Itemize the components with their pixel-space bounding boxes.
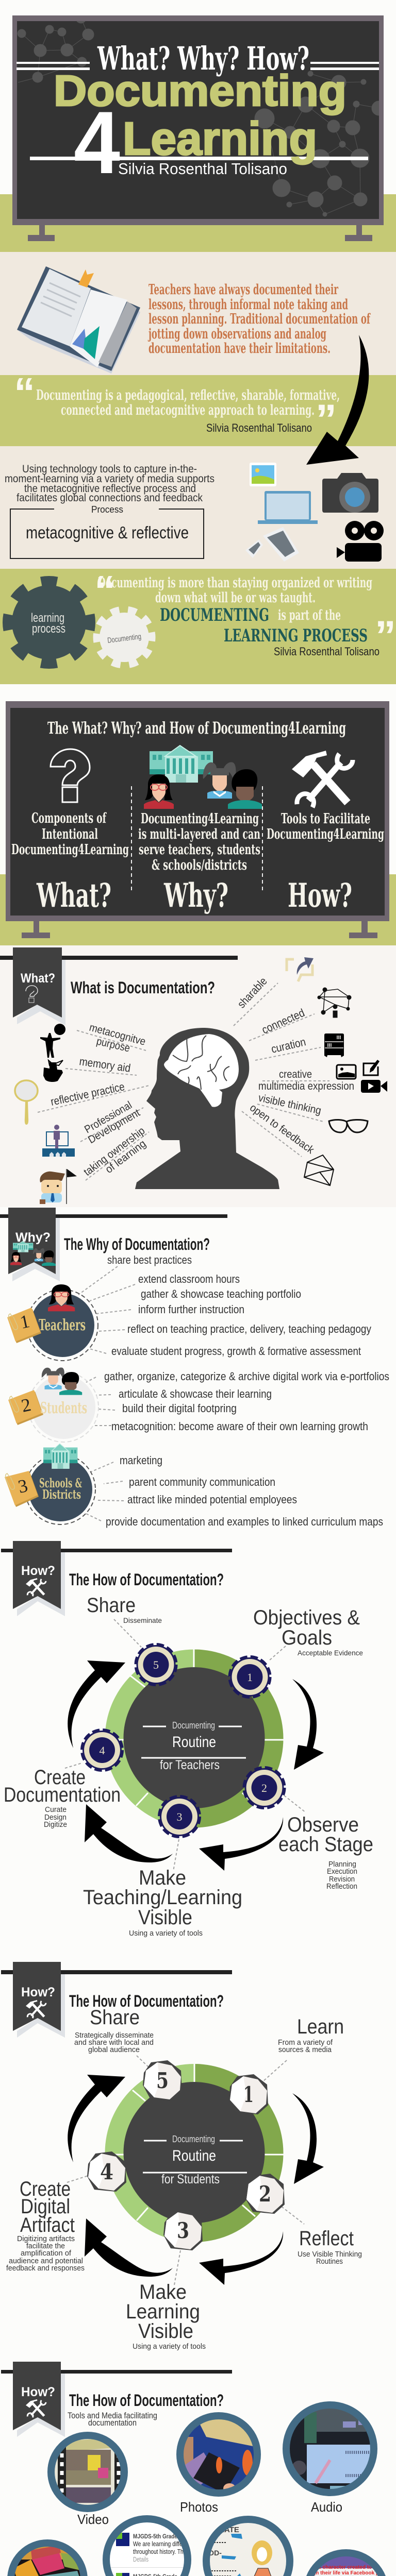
chart: routine ring bbox=[105, 2064, 284, 2242]
icon: thinking figure bbox=[40, 1024, 65, 1058]
step label: observe each stage: Planning bbox=[328, 1860, 356, 1869]
panel: teachers: Teachers bbox=[39, 1316, 86, 1334]
step label: make teaching learning visible bbox=[83, 1867, 242, 1938]
text: how column bbox=[267, 811, 384, 842]
step label: observe each stage: Observe bbox=[287, 1814, 359, 1836]
step label: create digital artifact: facilitate the bbox=[26, 2242, 65, 2250]
media: tweets: Details bbox=[133, 2555, 148, 2563]
icon: head with brain bbox=[135, 1028, 279, 1189]
text: teachers list bbox=[107, 1253, 371, 1358]
badge: step 2: 2 bbox=[261, 1782, 267, 1794]
icon: documenting gear: Documenting bbox=[107, 632, 142, 645]
opening quote mark: “ bbox=[14, 369, 35, 416]
heading: The How of Documentation? bbox=[69, 1992, 224, 2010]
label: creative multimedia expression: creative bbox=[279, 1069, 312, 1080]
step label: reflect: Use Visible Thinking bbox=[298, 2250, 362, 2259]
chart: routine ring: for Students bbox=[161, 2172, 220, 2187]
icon: video play bbox=[361, 1080, 387, 1093]
step label: create documentation: Digitize bbox=[44, 1820, 67, 1829]
panel: process box: Process bbox=[91, 504, 123, 515]
media: sketchnotes: DD- bbox=[209, 2549, 222, 2557]
board legs bbox=[28, 225, 372, 241]
board surface bbox=[17, 21, 379, 219]
label: metacognitive purpose: purpose bbox=[95, 1035, 131, 1055]
opening quote mark: “ bbox=[94, 567, 116, 614]
media: post-it notes bbox=[7, 2539, 88, 2576]
label: curation bbox=[255, 1035, 321, 1060]
label: professional development: Professional bbox=[82, 1099, 134, 1136]
badge: step 4 bbox=[82, 1731, 122, 1770]
step label: create digital artifact bbox=[6, 2178, 85, 2273]
icon: learning process gear: learning bbox=[31, 611, 64, 625]
step label: create documentation bbox=[4, 1766, 121, 1829]
panel: students bbox=[8, 1367, 98, 1442]
text: tools and media: documentation bbox=[88, 2418, 137, 2428]
section: tools and media bbox=[1, 2362, 389, 2576]
panel: schools and districts: Schools & bbox=[39, 1476, 82, 1490]
icon: share bbox=[287, 957, 314, 981]
gem: step 5: 5 bbox=[156, 2068, 169, 2093]
chart: routine ring: Routine bbox=[172, 2147, 216, 2164]
step label: observe each stage: Execution bbox=[327, 1867, 357, 1876]
label: connected bbox=[249, 1006, 315, 1041]
step label: create documentation: Create bbox=[34, 1766, 86, 1789]
icon: camera bbox=[322, 473, 378, 513]
text: why column: is multi-layered and can bbox=[138, 826, 260, 842]
panel: process box bbox=[10, 504, 204, 558]
callout: documenting quote: Silvia Rosenthal Tolisano bbox=[206, 421, 312, 434]
heading: What is Documentation? bbox=[71, 978, 215, 997]
gem: step 1 bbox=[229, 2074, 268, 2114]
text: tools and media bbox=[68, 2411, 157, 2428]
text: what column: Documenting4Learning bbox=[11, 842, 129, 858]
step label: create digital artifact: audience and potential bbox=[9, 2257, 83, 2265]
connectors bbox=[78, 1266, 135, 1521]
step label: make teaching learning visible: Visible bbox=[138, 1906, 192, 1929]
step label: objectives and goals: Goals bbox=[282, 1626, 332, 1649]
step label: objectives and goals: Acceptable Evidence bbox=[298, 1649, 363, 1657]
badge: step 4: 4 bbox=[99, 1744, 105, 1757]
ribbon: how: How? bbox=[21, 1985, 55, 1999]
step label: learn: From a variety of bbox=[278, 2038, 333, 2047]
chart: routine ring: for Teachers bbox=[160, 1758, 220, 1772]
panel: schools and districts bbox=[5, 1444, 95, 1524]
panel: schools and districts: 3 bbox=[16, 1475, 29, 1497]
arrow: curved black bbox=[306, 335, 369, 465]
label: reflective practice: reflective practice bbox=[50, 1080, 126, 1108]
label: connected: connected bbox=[260, 1006, 306, 1037]
section: how routine for students bbox=[1, 1962, 362, 2351]
media: screenshots bbox=[304, 2549, 389, 2576]
heading: The How of Documentation? bbox=[69, 1570, 224, 1589]
text: students list bbox=[104, 1370, 389, 1433]
icon: glasses bbox=[329, 1120, 368, 1132]
step label: create documentation: Curate bbox=[45, 1805, 67, 1814]
connectors bbox=[67, 2056, 304, 2285]
label: why: Why? bbox=[163, 876, 228, 915]
badge: step 1: 1 bbox=[247, 1671, 253, 1684]
heading: The How of Documentation? bbox=[69, 2391, 224, 2410]
media: video: Video bbox=[77, 2512, 109, 2527]
step label: reflect: Reflect bbox=[299, 2227, 354, 2250]
icon: hand mirror bbox=[15, 1080, 38, 1125]
label: metacognitive purpose bbox=[77, 1022, 147, 1055]
panel: process box: metacognitive & reflective bbox=[26, 523, 189, 542]
step label: share: and share with local and bbox=[74, 2038, 154, 2047]
media: tweets: We are learning differe bbox=[133, 2540, 187, 2548]
badge: step 3: 3 bbox=[176, 1810, 183, 1823]
step label: observe each stage bbox=[278, 1814, 373, 1891]
step label: share: Share bbox=[90, 2006, 140, 2029]
badge: step 5 bbox=[136, 1645, 175, 1684]
step label: reflect bbox=[298, 2227, 362, 2266]
text: what column: Components of bbox=[31, 810, 107, 826]
gem: step 3: 3 bbox=[177, 2218, 189, 2243]
label: reflective practice bbox=[38, 1080, 149, 1112]
icon: question mark bbox=[51, 749, 90, 802]
step label: create digital artifact: Create bbox=[20, 2178, 71, 2200]
step label: share bbox=[74, 2006, 154, 2054]
heading: learning: Learning bbox=[123, 113, 317, 165]
title rules bbox=[16, 62, 379, 160]
text: schools list: marketing bbox=[120, 1454, 162, 1467]
icon: tablet and phone bbox=[245, 527, 299, 562]
gem: step 4 bbox=[87, 2151, 126, 2192]
step label: make learning visible bbox=[126, 2281, 206, 2351]
text: teachers list: share best practices bbox=[107, 1253, 192, 1266]
callout: documenting quote bbox=[14, 369, 340, 443]
board surface bbox=[10, 708, 385, 916]
icon: learning process gear bbox=[9, 582, 89, 663]
step label: make learning visible: Learning bbox=[126, 2300, 200, 2323]
icon: documenting gear bbox=[93, 606, 155, 668]
media: audio: Audio bbox=[311, 2499, 342, 2515]
text: why column: serve teachers, students bbox=[139, 842, 260, 858]
ribbon: why bbox=[8, 1208, 60, 1281]
panel: teachers: 1 bbox=[18, 1311, 31, 1333]
step label: make teaching learning visible: Using a variety of tools bbox=[129, 1929, 203, 1938]
media: screenshots: ous character created to be bbox=[312, 2565, 380, 2570]
step label: create digital artifact: feedback and responses bbox=[6, 2264, 85, 2273]
closing quote mark: ” bbox=[316, 396, 337, 443]
text: schools list bbox=[106, 1454, 383, 1528]
arrows: cycle bbox=[68, 2075, 324, 2285]
step label: create digital artifact: Artifact bbox=[20, 2214, 75, 2236]
step label: learn bbox=[278, 2015, 344, 2054]
label: visible thinking: visible thinking bbox=[257, 1092, 322, 1117]
media: photos bbox=[175, 2411, 263, 2515]
gem: step 2 bbox=[245, 2174, 285, 2214]
badge: step 1 bbox=[230, 1657, 269, 1697]
text: why column bbox=[138, 811, 260, 873]
label: sharable bbox=[234, 975, 278, 1026]
icon: edit pencil bbox=[364, 1060, 380, 1075]
text: schools list: attract like minded potential employees bbox=[127, 1493, 297, 1506]
text block: using technology: moment-learning via a variety of media supports bbox=[5, 473, 214, 485]
icon: filing cabinet bbox=[324, 1033, 344, 1057]
icon: picture card bbox=[250, 463, 276, 486]
ribbon: how: How? bbox=[21, 1564, 55, 1578]
gem: step 2: 2 bbox=[259, 2181, 271, 2207]
badge: step 2 bbox=[244, 1768, 284, 1807]
icon: envelope bbox=[304, 1155, 334, 1185]
label: metacognitive purpose: metacognitve bbox=[88, 1022, 147, 1048]
step label: make teaching learning visible: Make bbox=[139, 1867, 186, 1889]
step label: share: Strategically disseminate bbox=[75, 2031, 154, 2040]
step label: reflect: Routines bbox=[316, 2257, 343, 2266]
badge: step 3 bbox=[160, 1797, 199, 1836]
text block: using technology: facilitates global connections and feedback bbox=[16, 492, 203, 504]
heading: numeral 4: 4 bbox=[74, 93, 120, 192]
gem: step 3 bbox=[163, 2210, 203, 2250]
label: taking ownership of learning: taking ownership bbox=[81, 1125, 147, 1178]
step label: make learning visible: Using a variety of tools bbox=[133, 2342, 206, 2351]
step label: observe each stage: Revision bbox=[329, 1875, 355, 1884]
step label: learn: sources & media bbox=[278, 2045, 332, 2054]
ribbon: what bbox=[13, 947, 65, 1025]
step label: make learning visible: Make bbox=[139, 2281, 187, 2303]
step label: share: global audience bbox=[88, 2045, 140, 2054]
badge: step 5: 5 bbox=[153, 1658, 159, 1671]
chart: routine ring bbox=[105, 1649, 284, 1828]
section: how routine for teachers bbox=[1, 1541, 373, 1938]
text: tools and media: Tools and Media facilitating bbox=[68, 2411, 157, 2420]
heading: The Why of Documentation? bbox=[64, 1235, 210, 1253]
media: photos: Photos bbox=[180, 2499, 218, 2515]
step label: objectives and goals: Objectives & bbox=[253, 1606, 360, 1629]
text: teachers list: inform further instruction bbox=[138, 1303, 244, 1316]
board legs bbox=[22, 921, 377, 938]
ribbon: how bbox=[13, 2362, 65, 2437]
callout: documenting is more than bbox=[94, 567, 396, 659]
media: screenshots: ugh their life via Facebook page bbox=[309, 2570, 388, 2576]
brain bbox=[164, 1034, 239, 1107]
label: taking ownership of learning: of learning bbox=[103, 1138, 148, 1176]
icon: open book bbox=[17, 266, 140, 374]
text block: using technology bbox=[5, 463, 214, 504]
step label: share bbox=[87, 1594, 162, 1624]
panel: students: Students bbox=[40, 1399, 87, 1417]
label: sharable: sharable bbox=[235, 975, 270, 1010]
icon: laptop bbox=[258, 491, 318, 524]
callout: documenting is more than: DOCUMENTING bbox=[160, 605, 269, 625]
step label: learn: Learn bbox=[297, 2015, 344, 2038]
gem: step 1: 1 bbox=[243, 2082, 254, 2107]
media: tweets: MJGDS-5th Grade bbox=[133, 2533, 177, 2540]
label: creative multimedia expression bbox=[258, 1069, 354, 1092]
label: how: How? bbox=[288, 876, 352, 915]
chart: routine ring: Documenting bbox=[172, 2134, 215, 2144]
media: audio bbox=[283, 2400, 377, 2515]
text: what column bbox=[11, 810, 129, 858]
panel: students: 2 bbox=[20, 1394, 32, 1416]
author: Silvia Rosenthal Tolisano bbox=[118, 160, 287, 178]
label: professional development: Development bbox=[86, 1107, 142, 1146]
label: creative multimedia expression: multimedia expression bbox=[258, 1080, 354, 1092]
chart: routine ring: Documenting bbox=[172, 1720, 215, 1731]
step label: create digital artifact: Digital bbox=[21, 2195, 70, 2218]
ribbon: what: What? bbox=[21, 971, 55, 986]
text: students list: build their digital footpring bbox=[122, 1402, 237, 1415]
icon: presenter bbox=[42, 1125, 75, 1157]
icon: video camera bbox=[337, 521, 384, 562]
callout: documenting is more than: is part of the bbox=[278, 607, 341, 623]
step label: observe each stage: Reflection bbox=[326, 1882, 357, 1891]
label: what: What? bbox=[36, 876, 111, 915]
label: curation: curation bbox=[270, 1035, 307, 1056]
step label: share: Share bbox=[87, 1594, 136, 1617]
icon: hammer and wrench bbox=[292, 751, 353, 807]
media: video bbox=[46, 2432, 129, 2527]
text: why column: Documenting4Learning bbox=[141, 811, 259, 827]
icon: learning process gear: process bbox=[32, 622, 65, 636]
step label: make teaching learning visible: Teaching/Learning bbox=[83, 1886, 242, 1909]
board frame bbox=[6, 701, 389, 921]
section: the why of documentation bbox=[0, 1208, 389, 1528]
gem: step 4: 4 bbox=[100, 2159, 113, 2184]
text block: using technology: the metacognitive reflective process and bbox=[24, 483, 196, 495]
media: tweets bbox=[103, 2515, 191, 2576]
chart: routine ring: Routine bbox=[172, 1734, 216, 1751]
text: teachers list: gather & showcase teaching portfolio bbox=[141, 1287, 301, 1300]
heading: documenting: Documenting bbox=[54, 66, 346, 115]
step label: objectives and goals bbox=[253, 1606, 363, 1657]
text: what column: Intentional bbox=[42, 826, 98, 842]
icon: school with people bbox=[144, 745, 262, 809]
ribbon: how bbox=[13, 1541, 65, 1616]
icon: image frame bbox=[337, 1065, 356, 1079]
media: sketchnotes bbox=[203, 2515, 295, 2576]
step label: observe each stage: each Stage bbox=[278, 1833, 373, 1856]
media: tweets: throughout history. This bbox=[133, 2548, 187, 2555]
gem: step 5 bbox=[143, 2060, 182, 2100]
panel: title chalkboard bbox=[12, 13, 386, 241]
icon: finger with bow bbox=[43, 1060, 63, 1082]
media: sketchnotes: EATE bbox=[219, 2526, 239, 2534]
icon: man with flag bbox=[40, 1169, 77, 1204]
step label: create digital artifact: Digitizing artifacts bbox=[17, 2234, 75, 2243]
text: teachers list: extend classroom hours bbox=[138, 1273, 240, 1285]
text: students list: articulate & showcase their learning bbox=[119, 1387, 272, 1400]
section: what is documentation bbox=[0, 947, 387, 1204]
panel: teachers bbox=[7, 1284, 98, 1361]
step label: create documentation: Documentation bbox=[4, 1784, 121, 1806]
label: memory aid: memory aid bbox=[78, 1055, 131, 1075]
ribbon: how: How? bbox=[21, 2385, 55, 2399]
panel: overview chalkboard bbox=[6, 701, 389, 938]
step label: make learning visible: Visible bbox=[138, 2320, 193, 2343]
panel: schools and districts: Districts bbox=[42, 1487, 81, 1502]
text block: using technology: Using technology tools to capture in-the- bbox=[22, 463, 197, 475]
ribbon: how bbox=[13, 1962, 65, 2038]
board frame bbox=[12, 15, 384, 225]
network pattern bbox=[18, 13, 386, 216]
step label: create documentation: Design bbox=[44, 1813, 67, 1822]
step label: create digital artifact: amplification of bbox=[21, 2249, 72, 2258]
step label: share: Disseminate bbox=[123, 1616, 162, 1624]
icon: network bbox=[318, 988, 351, 1018]
text: schools list: parent community communication bbox=[129, 1476, 275, 1488]
closing quote mark: ” bbox=[375, 613, 396, 659]
ribbon: why: Why? bbox=[15, 1230, 51, 1245]
callout: documenting is more than: Silvia Rosenthal Tolisano bbox=[274, 645, 380, 658]
connectors bbox=[65, 1619, 306, 1871]
arrows: cycle bbox=[68, 1660, 324, 1871]
text block: teachers have always documented bbox=[148, 282, 371, 357]
label: open to feedback: open to feedback bbox=[248, 1101, 317, 1156]
text: why column: & schools/districts bbox=[152, 857, 247, 873]
